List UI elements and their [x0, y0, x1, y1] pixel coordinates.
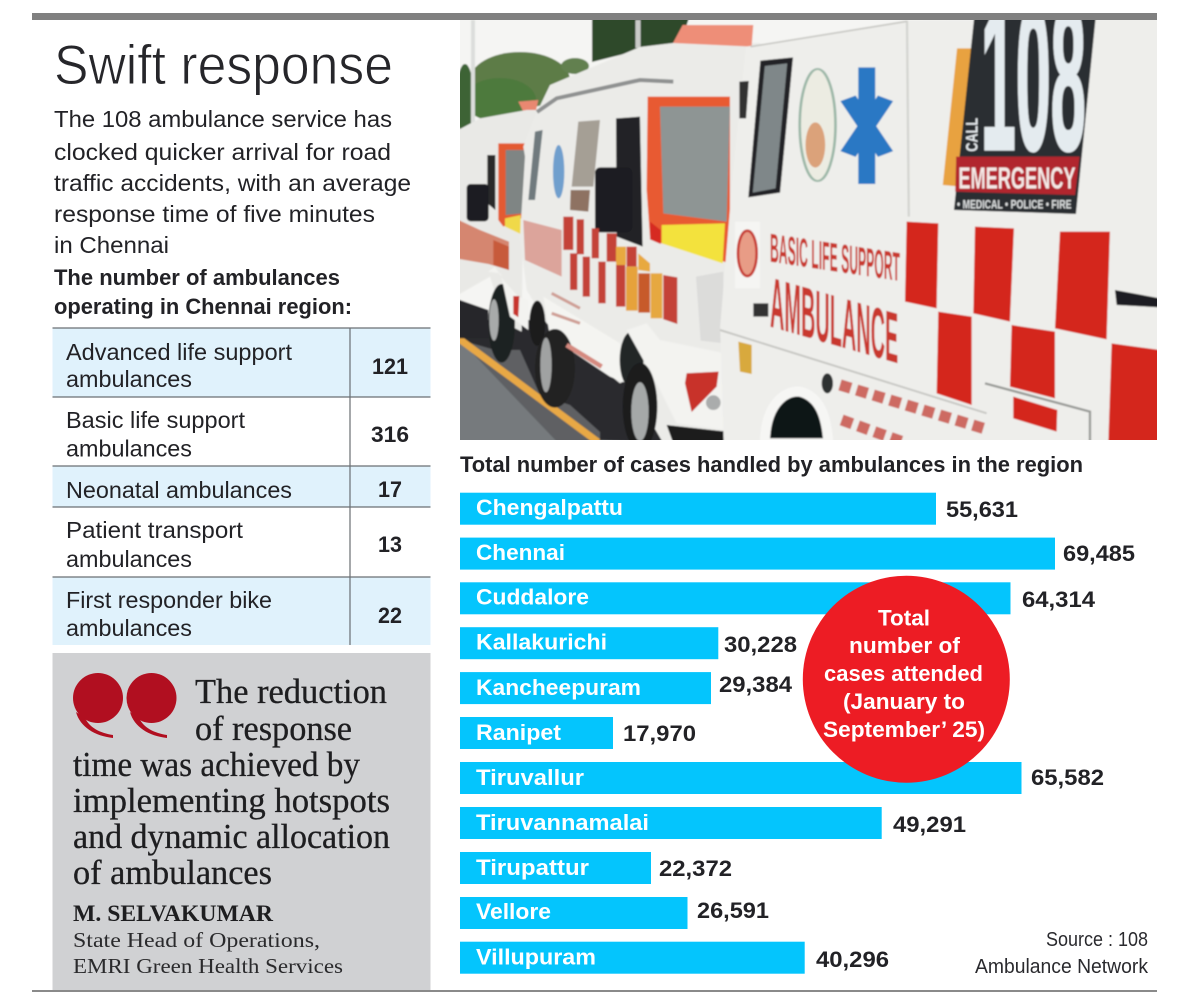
bar: Chennai: 69,485: [1063, 541, 1135, 566]
intro text block: traffic accidents, with an average: [54, 170, 411, 196]
row: patient transport: 13: [378, 532, 402, 557]
bar: Chennai: Chennai: [476, 540, 565, 565]
quote attribution: EMRI Green Health Services: [73, 954, 343, 978]
table heading: operating in Chennai region:: [54, 294, 352, 319]
quote attribution: M. SELVAKUMAR: [73, 901, 273, 926]
chart title: Total number of cases handled by ambulances in the region: [460, 452, 1083, 477]
table heading: The number of ambulances: [54, 265, 340, 290]
bar: Cuddalore: 64,314: [1022, 587, 1096, 612]
row: advanced life support: 121: [372, 354, 408, 379]
bar: Kallakurichi: Kallakurichi: [476, 630, 607, 654]
state emblem: [800, 69, 835, 181]
callout: total cases circle: cases attended: [824, 661, 983, 686]
quote text: implementing hotspots: [73, 781, 390, 820]
intro text block: response time of five minutes: [54, 201, 375, 227]
trees: [456, 15, 690, 136]
icon: star of life: [848, 67, 886, 184]
panel: left intro column: [54, 33, 411, 319]
row: patient transport: [66, 517, 402, 572]
front fender and wheels: [620, 332, 644, 388]
row: advanced life support: Advanced life support: [66, 339, 293, 365]
callout: total cases circle: number of: [849, 633, 961, 658]
row: advanced life support: [66, 339, 408, 392]
vehicle lettering: [770, 225, 900, 379]
quote text: of ambulances: [73, 853, 272, 892]
bar: Kancheepuram: [460, 672, 793, 704]
quote attribution: State Head of Operations,: [73, 928, 320, 952]
title: Swift response: [54, 33, 393, 96]
intro text block: [54, 106, 411, 258]
bar: Villupuram: 40,296: [816, 947, 889, 972]
bar: Cuddalore: Cuddalore: [476, 584, 589, 610]
bar: Tirupattur: [460, 852, 732, 884]
bar: Tiruvannamalai: [460, 807, 966, 839]
bar: Ranipet: [460, 717, 696, 749]
badge: [735, 222, 760, 288]
rear ambulance: [455, 100, 540, 363]
bar: Ranipet: 17,970: [623, 721, 696, 746]
quote attribution: [73, 901, 343, 978]
panel: ambulance table: [52, 328, 430, 645]
photo: parked ambulances: [460, 0, 1157, 440]
row: first responder bike: 22: [378, 603, 402, 628]
red checks: [905, 222, 1160, 443]
lower skirt: [543, 297, 627, 383]
bar: Kallakurichi: 30,228: [724, 632, 797, 657]
bar: Kancheepuram: Kancheepuram: [476, 675, 641, 700]
intro text block: in Chennai: [54, 232, 169, 258]
quote text: [73, 672, 390, 892]
side window: [748, 57, 793, 197]
bar: Vellore: Vellore: [476, 899, 551, 924]
front ambulance: [720, 0, 1162, 443]
bar: Tirupattur: Tirupattur: [476, 855, 589, 880]
bottom rule: [32, 990, 1157, 992]
intro text block: clocked quicker arrival for road: [54, 139, 391, 165]
bar: Tirupattur: 22,372: [659, 856, 732, 881]
quote text: and dynamic allocation: [73, 817, 390, 856]
row: first responder bike: ambulances: [66, 615, 192, 641]
icon: quotation marks: [73, 673, 176, 738]
bar: Vellore: 26,591: [697, 898, 769, 923]
bar: Kallakurichi: [460, 627, 797, 659]
bar: Chennai: [460, 538, 1135, 570]
bar: Tiruvannamalai: 49,291: [893, 812, 966, 837]
bar: Cuddalore: [460, 582, 1096, 614]
row: basic life support: Basic life support: [66, 407, 246, 433]
middle ambulance checker band: [563, 217, 677, 324]
bar: Tiruvannamalai: Tiruvannamalai: [476, 810, 649, 835]
row: patient transport: ambulances: [66, 546, 192, 572]
row: basic life support: ambulances: [66, 436, 192, 462]
row: first responder bike: First responder bike: [66, 587, 272, 613]
bar: Chengalpattu: Chengalpattu: [476, 495, 623, 520]
row: basic life support: 316: [371, 422, 409, 447]
row: first responder bike: [66, 587, 402, 641]
top rule: [32, 13, 1157, 20]
row: advanced life support: ambulances: [66, 366, 192, 392]
bar: Villupuram: Villupuram: [476, 944, 596, 970]
row: basic life support: [66, 407, 409, 462]
orange strip: [943, 48, 972, 187]
callout: total cases circle: September’ 25): [823, 717, 985, 742]
bar: Chengalpattu: 55,631: [946, 497, 1018, 522]
bar: Villupuram: [460, 942, 889, 974]
source note: Source : 108: [1046, 929, 1148, 951]
source note: Ambulance Network: [975, 956, 1149, 978]
bar: Chengalpattu: [460, 493, 1018, 525]
table heading: [54, 265, 352, 319]
bar: Kancheepuram: 29,384: [719, 672, 793, 697]
road: [455, 320, 740, 445]
row: neonatal: [66, 477, 402, 503]
call 108 sticker: • MEDICAL • POLICE • FIRE: [957, 199, 1071, 212]
callout: total cases circle: (January to: [843, 689, 965, 714]
bar: Tiruvallur: Tiruvallur: [476, 765, 584, 790]
row: neonatal: Neonatal ambulances: [66, 477, 292, 503]
callout: total cases circle: Total: [878, 606, 930, 631]
quote text: of response: [195, 709, 352, 748]
row: neonatal: 17: [378, 477, 402, 502]
panel: quote: [52, 653, 430, 990]
call 108 sticker: [954, 0, 1096, 214]
quote text: The reduction: [195, 672, 387, 711]
quote text: time was achieved by: [73, 745, 360, 784]
bar: Vellore: [460, 897, 769, 929]
intro text block: The 108 ambulance service has: [54, 106, 392, 132]
source note: [975, 929, 1149, 978]
bar: Tiruvallur: 65,582: [1031, 765, 1104, 790]
bar: Tiruvallur: [460, 762, 1104, 794]
row: patient transport: Patient transport: [66, 517, 244, 543]
middle ambulance: [520, 25, 760, 451]
bar: Ranipet: Ranipet: [476, 720, 562, 745]
callout: total cases circle: [803, 576, 1010, 783]
bar chart: cases by district: [460, 493, 1135, 974]
call 108 sticker: CALL: [963, 118, 982, 152]
